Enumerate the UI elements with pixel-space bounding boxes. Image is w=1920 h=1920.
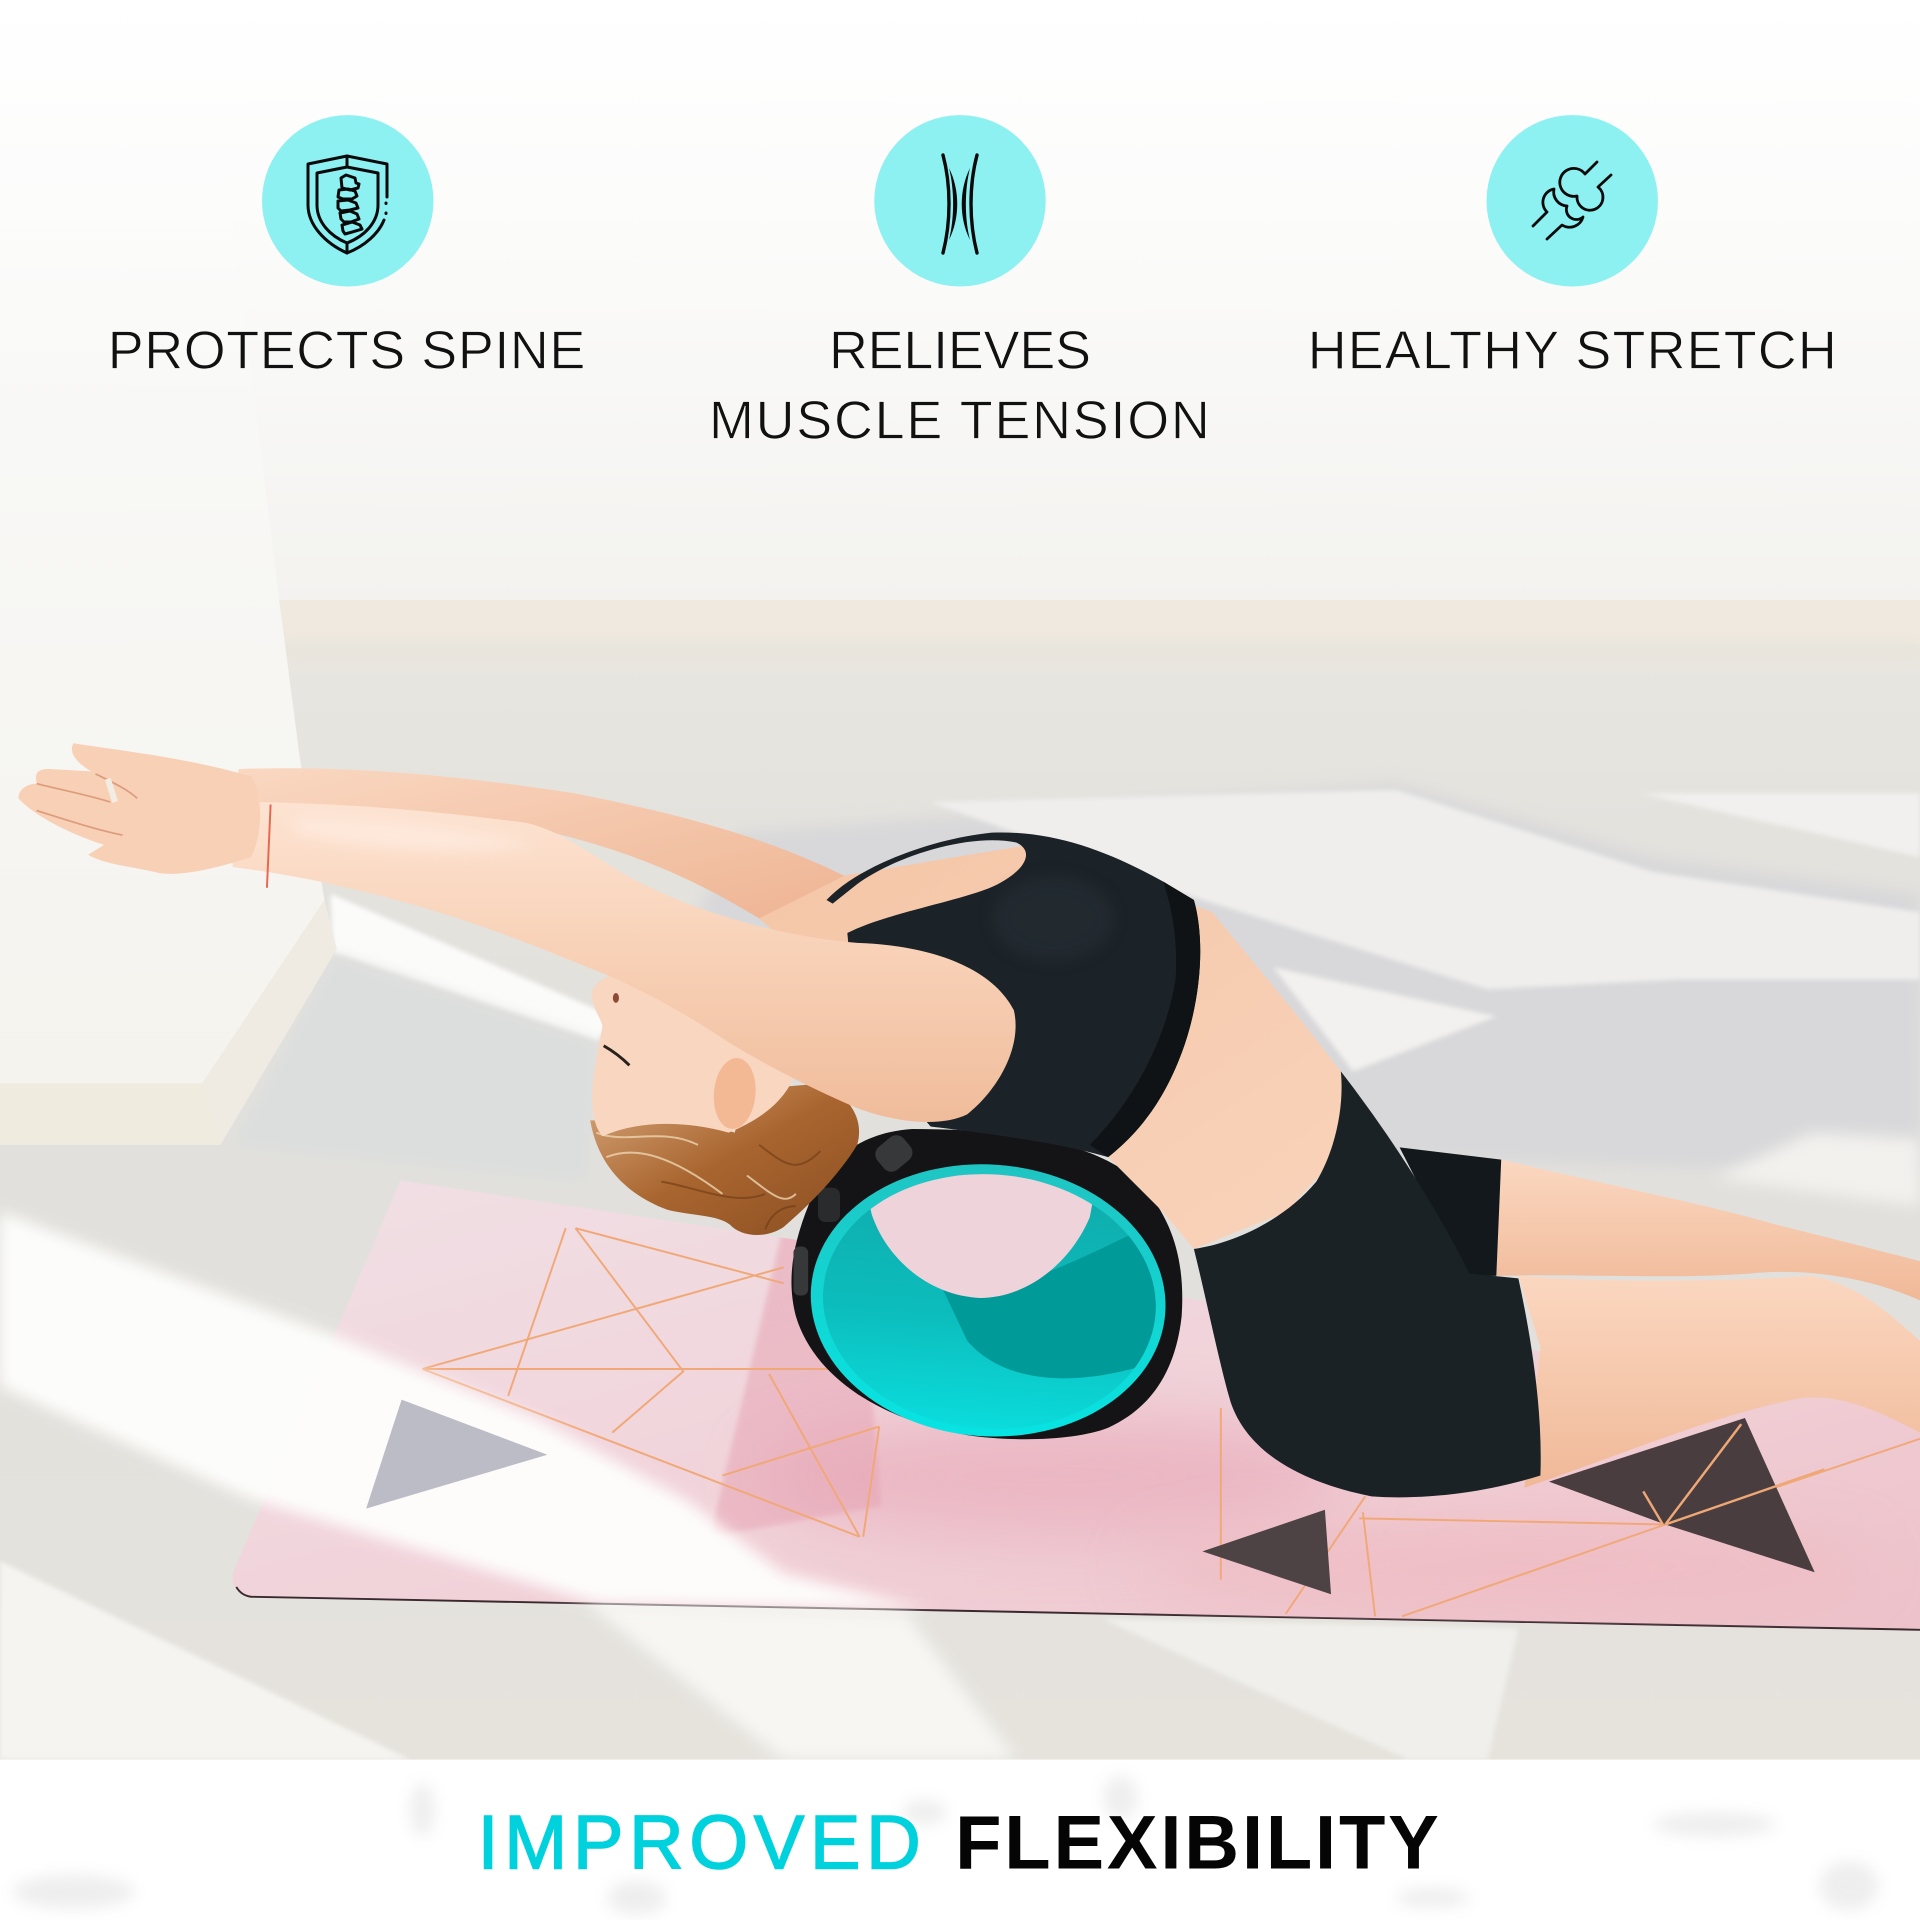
benefit: relieves muscle tension <box>709 115 1210 450</box>
icon circle: muscle <box>874 115 1046 287</box>
icon: joint <box>1533 162 1611 239</box>
hands <box>18 743 260 874</box>
floor sunlight and shadow patches <box>0 784 1920 1760</box>
hair <box>590 1084 859 1235</box>
headline <box>478 1801 1439 1886</box>
headline: IMPROVED <box>478 1801 921 1886</box>
icon: muscle tension <box>943 155 977 253</box>
benefit: healthy stretch <box>1308 115 1837 381</box>
marble veining <box>12 1776 1878 1915</box>
chest skin <box>759 845 1353 1249</box>
floor <box>0 600 1920 1763</box>
mat pink watercolor <box>710 1224 882 1537</box>
icon circle: spine <box>262 115 433 287</box>
near arm and shoulder <box>233 802 1016 1122</box>
label: relieves muscle tension: RELIEVES <box>829 321 1091 381</box>
far leg <box>1496 1160 1920 1300</box>
wheel dark inner shadow <box>943 1236 1156 1378</box>
label: relieves muscle tension <box>709 321 1210 450</box>
benefit: protects spine <box>108 115 585 381</box>
headline: FLEXIBILITY <box>955 1801 1439 1886</box>
wheel black outer <box>791 1129 1182 1439</box>
sunlight band across floor and mat <box>0 1212 931 1610</box>
nostril <box>613 993 619 1003</box>
wheel teal rim <box>802 1152 1175 1448</box>
yoga wheel <box>791 1129 1182 1448</box>
label: healthy stretch: HEALTHY STRETCH <box>1308 321 1837 381</box>
bottom marble banner <box>0 1760 1920 1920</box>
near leg <box>1518 1276 1920 1488</box>
sports bra <box>827 832 1200 1157</box>
hair dark strands <box>661 1145 820 1229</box>
background wall <box>0 0 1920 612</box>
far arm <box>233 768 851 918</box>
face <box>591 967 793 1136</box>
yoga mat <box>232 1180 1920 1630</box>
label: protects spine: PROTECTS SPINE <box>108 321 585 381</box>
mat gold lines over dark triangle <box>1643 1424 1824 1524</box>
mat triangle: small dark <box>1202 1510 1331 1594</box>
label: relieves muscle tension: MUSCLE TENSION <box>709 390 1210 450</box>
white column <box>0 73 337 1145</box>
icon: spine shield <box>308 156 387 253</box>
wheel teal interior <box>814 1163 1164 1440</box>
hair blond streaks <box>596 1133 796 1199</box>
ear <box>711 1056 759 1131</box>
mat triangle: large dark <box>1549 1418 1815 1572</box>
mat gold lines <box>422 1228 1920 1616</box>
mat triangle: grey <box>366 1400 547 1509</box>
bracelet <box>267 804 271 888</box>
icon circle: joint <box>1487 115 1658 287</box>
eye <box>604 1046 629 1065</box>
finger creases <box>37 774 137 835</box>
wheel see-through opening <box>870 1174 1092 1298</box>
wheel bumps <box>793 1131 916 1296</box>
shorts <box>1194 1071 1541 1497</box>
arm highlight <box>294 818 539 851</box>
ring <box>108 779 115 802</box>
